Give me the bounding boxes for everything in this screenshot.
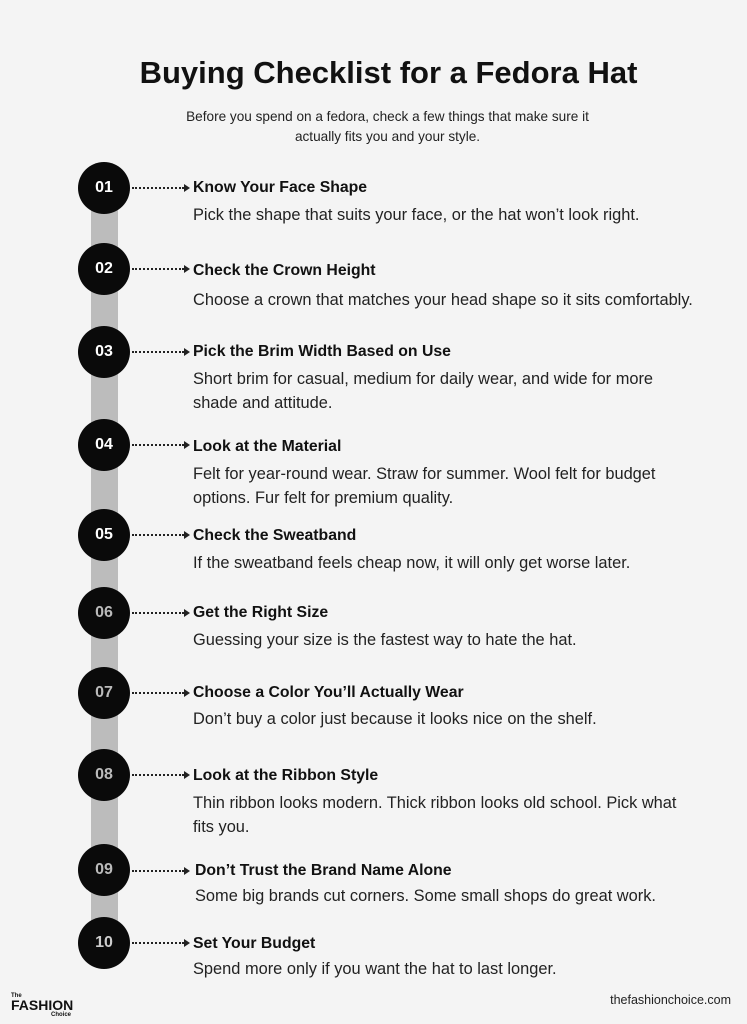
step 03: Pick the Brim Width Based on Use — [193, 343, 451, 360]
step 04 — [78, 419, 656, 507]
website: thefashionchoice.com — [610, 993, 731, 1007]
step 02: Check the Crown Height — [193, 262, 376, 279]
step 04: Look at the Material — [193, 438, 341, 455]
step 02: Choose a crown that matches your head shape so it sits comfortably. — [193, 291, 693, 309]
step 05: 05 — [95, 526, 113, 543]
step 03: 03 — [95, 343, 113, 360]
step 05 — [78, 509, 630, 572]
step 06: Guessing your size is the fastest way to hate the hat. — [193, 631, 577, 649]
step 07 — [78, 667, 597, 728]
step 09: Don’t Trust the Brand Name Alone — [195, 862, 452, 879]
step 04: 04 — [95, 436, 113, 453]
step 01 — [78, 162, 639, 224]
step 09: Some big brands cut corners. Some small shops do great work. — [195, 887, 656, 905]
step 03 — [78, 326, 653, 412]
step 06: Get the Right Size — [193, 604, 328, 621]
step 06 — [78, 587, 577, 649]
step 05: Check the Sweatband — [193, 527, 356, 544]
logo: FASHION — [11, 997, 73, 1013]
logo — [11, 992, 73, 1018]
title: Buying Checklist for a Fedora Hat — [140, 55, 637, 90]
subtitle: Before you spend on a fedora, check a few things that make sure it actually fits you and your style. — [186, 109, 589, 144]
step 07: 07 — [95, 684, 113, 701]
step 01: 01 — [95, 179, 113, 196]
step 01: Know Your Face Shape — [193, 179, 367, 196]
logo: Choice — [51, 1012, 71, 1018]
step 03: Short brim for casual, medium for daily wear, and wide for more shade and attitude. — [193, 370, 653, 412]
step 02: 02 — [95, 260, 113, 277]
step 01: Pick the shape that suits your face, or the hat won’t look right. — [193, 206, 639, 224]
step 02 — [78, 243, 693, 309]
timeline bar — [91, 190, 118, 945]
step 08: Thin ribbon looks modern. Thick ribbon looks old school. Pick what fits you. — [193, 794, 676, 836]
step 04: Felt for year-round wear. Straw for summer. Wool felt for budget options. Fur felt for premium quality. — [193, 465, 655, 507]
step 06: 06 — [95, 604, 113, 621]
step 10: Spend more only if you want the hat to last longer. — [193, 960, 557, 978]
step 07: Choose a Color You’ll Actually Wear — [193, 684, 464, 701]
step 10: 10 — [95, 934, 113, 951]
step 08: 08 — [95, 766, 113, 783]
logo: The — [11, 993, 22, 999]
step 05: If the sweatband feels cheap now, it will only get worse later. — [193, 554, 630, 572]
step 08: Look at the Ribbon Style — [193, 767, 378, 784]
step 07: Don’t buy a color just because it looks nice on the shelf. — [193, 710, 597, 728]
step 09: 09 — [95, 861, 113, 878]
step 10: Set Your Budget — [193, 935, 315, 952]
